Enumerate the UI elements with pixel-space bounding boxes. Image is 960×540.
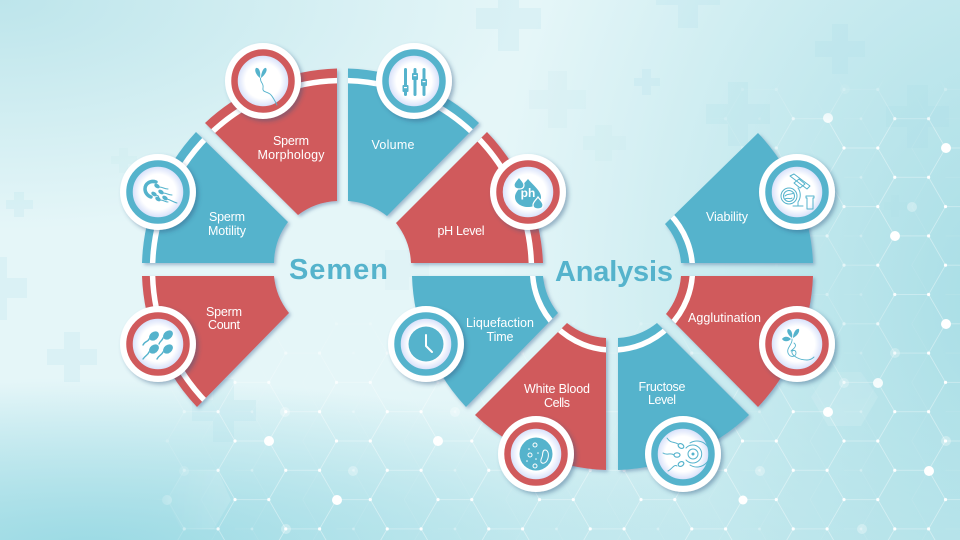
badge: Sperm Count <box>120 306 196 382</box>
panel: Volume: Volume <box>372 138 415 152</box>
panel: Sperm Count: Sperm <box>206 305 242 319</box>
panel: Sperm Motility <box>142 132 291 267</box>
panel: Volume <box>348 68 482 219</box>
right half wheel: Analysis <box>412 133 813 470</box>
panel: pH Level: pH Level <box>438 224 484 238</box>
badge: Agglutination <box>759 306 835 382</box>
icon: volume sliders <box>402 68 427 96</box>
panel: Sperm Morphology <box>205 68 341 218</box>
badge: pH Level <box>490 154 566 230</box>
panel: Liquefaction Time <box>412 276 561 410</box>
panel: White Blood Cells <box>475 323 610 474</box>
panel: Sperm Morphology: Sperm <box>273 134 309 148</box>
panel: Fructose Level <box>618 323 752 474</box>
icon: sperm count <box>143 328 175 359</box>
left half wheel: Semen <box>142 68 547 410</box>
badge: Liquefaction Time <box>388 306 464 382</box>
icon: microscope <box>781 174 814 209</box>
icon: sperm morphology <box>255 68 277 105</box>
panel: Liquefaction Time: Time <box>486 330 514 344</box>
panel: Fructose Level: Level <box>648 393 676 407</box>
badge: Sperm Motility <box>120 154 196 230</box>
panel: Fructose Level: Fructose <box>638 380 686 394</box>
panel: Sperm Motility: Sperm <box>209 210 245 224</box>
badge: Volume <box>376 43 452 119</box>
icon: pH drop: ph <box>521 186 535 200</box>
panel: White Blood Cells: White Blood <box>524 382 590 396</box>
panel: Viability <box>665 133 816 267</box>
icon: agglutinated sperm <box>782 329 814 360</box>
hexagon network <box>162 88 960 540</box>
panel: pH Level <box>396 132 547 267</box>
panel: Sperm Count <box>142 276 292 410</box>
icon: blood cell <box>520 438 552 470</box>
title: Semen: Semen <box>289 254 388 286</box>
panel: Liquefaction Time: Liquefaction <box>466 316 534 330</box>
badge: Sperm Morphology <box>225 43 301 119</box>
icon: sperm motility <box>145 181 177 203</box>
panel: Sperm Motility: Motility <box>208 224 247 238</box>
icon: egg and sperm <box>663 438 710 471</box>
panel: Agglutination: Agglutination <box>688 311 761 325</box>
panel: Agglutination <box>666 276 816 410</box>
badge: Fructose Level <box>645 416 721 492</box>
icon: clock <box>408 326 444 362</box>
panel: Viability: Viability <box>706 210 749 224</box>
panel: White Blood Cells: Cells <box>544 396 570 410</box>
panel: Sperm Morphology: Morphology <box>258 148 325 162</box>
title: Analysis: Analysis <box>555 256 673 288</box>
badge: White Blood Cells <box>498 416 574 492</box>
badge: Viability <box>759 154 835 230</box>
panel: Sperm Count: Count <box>208 318 241 332</box>
